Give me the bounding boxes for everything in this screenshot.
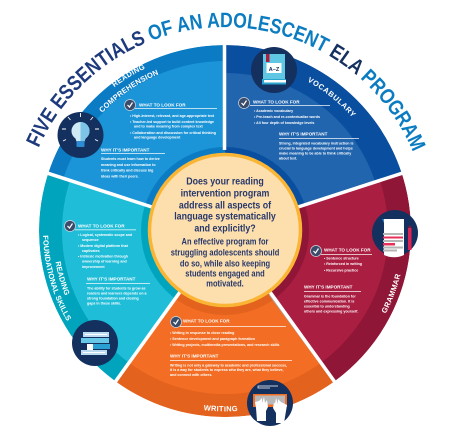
text: what to look for: WHAT TO LOOK FOR: [324, 248, 371, 252]
text: why it's important: The ability for students to grow as: [87, 286, 146, 290]
text: why it's important: [86, 276, 150, 306]
text: why it's important: Students must learn how to derive: [101, 157, 160, 161]
text: why it's important: meaning and use information to: [101, 163, 156, 167]
text: why it's important: [170, 354, 292, 377]
text: why it's important: [279, 132, 359, 160]
text: what to look for: [124, 100, 217, 140]
text: why it's important: make meaning to be able to think critically: [279, 152, 351, 156]
text: what to look for: • Pre-teach and re-contextualize words: [254, 115, 320, 119]
panel: reading foundational skills: [39, 175, 178, 380]
heading: foundational skills: FOUNDATIONAL SKILLS: [43, 236, 71, 320]
heading: grammar: GRAMMAR: [382, 274, 400, 313]
text: what to look for: WHAT TO LOOK FOR: [183, 318, 230, 324]
icon: a-z book: [251, 47, 297, 93]
text: what to look for: • Logical, systematic scope and: [78, 233, 132, 237]
text: what to look for: • Writing projects, multimedia presentations, and research skills: [170, 343, 279, 347]
text: why it's important: others and expressing yourself.: [304, 310, 358, 314]
text: why it's important: Strong, integrated vocabulary instruction is: [279, 142, 353, 146]
answer: do so, while also keeping: [180, 258, 270, 269]
text: why it's important: it is a way for students to express who they are, what they believe,: [170, 368, 283, 372]
heading: vocabulary: VOCABULARY: [308, 76, 356, 116]
text: what to look for: [238, 98, 330, 125]
text: what to look for: • Reinforced in writing: [324, 262, 362, 266]
text: why it's important: strong foundation and closing: [87, 296, 139, 300]
panel: writing: [117, 294, 333, 417]
text: why it's important: Writing is not only a gateway to academic and professional success,: [170, 364, 287, 368]
text: what to look for: • Recursive practice: [324, 268, 358, 272]
question: address all aspects of: [179, 200, 272, 212]
text: what to look for: • Intrinsic motivation through: [78, 254, 128, 258]
text: what to look for: • Academic vocabulary: [254, 109, 293, 113]
text: why it's important: crucial to language development and helps: [279, 146, 353, 150]
question: language systematically: [174, 211, 276, 223]
question: Does your reading: [186, 176, 264, 188]
panel: reading comprehension: [48, 45, 225, 206]
icon: keyboard and hands: [247, 380, 293, 426]
icon: light bulb: [58, 112, 104, 158]
text: what to look for: [64, 220, 136, 269]
text: why it's important: WHY IT'S IMPORTANT: [304, 284, 353, 290]
text: what to look for: WHAT TO LOOK FOR: [253, 100, 300, 104]
text: what to look for: WHAT TO LOOK FOR: [139, 102, 186, 108]
icon: document and pencil: [372, 210, 418, 257]
text: why it's important: and connect with others.: [170, 373, 212, 377]
text: what to look for: [170, 316, 286, 347]
text: why it's important: [304, 284, 361, 314]
answer: motivated.: [206, 278, 244, 289]
text: why it's important: essential to understanding: [304, 304, 350, 308]
text: what to look for: and language development: [134, 136, 181, 140]
icon: stacked books: [72, 320, 118, 366]
text: what to look for: • Writing in response to close reading: [170, 331, 234, 335]
answer: students engaged and: [185, 268, 265, 279]
text: what to look for: WHAT TO LOOK FOR: [78, 224, 125, 228]
heading: comprehension: COMPREHENSION: [100, 70, 158, 112]
text: why it's important: WHY IT'S IMPORTANT: [279, 132, 328, 136]
text: what to look for: • Collaboration and discussion for critical thinking: [130, 131, 216, 135]
text: why it's important: WHY IT'S IMPORTANT: [101, 148, 150, 152]
text: what to look for: ownership of learning and: [82, 260, 127, 264]
text: what to look for: [310, 246, 372, 272]
text: why it's important: WHY IT'S IMPORTANT: [87, 276, 136, 282]
text: what to look for: • Sentence structure: [324, 256, 359, 260]
text: why it's important: [101, 148, 165, 178]
answer: struggling adolescents should: [171, 247, 279, 258]
text: what to look for: • All four depth of knowledge levels: [254, 121, 314, 125]
answer: [171, 236, 279, 289]
answer: An effective program for: [182, 236, 269, 247]
text: what to look for: and to make meaning from complex text: [134, 124, 204, 128]
text: why it's important: Grammar is the foundation for: [304, 294, 356, 298]
text: what to look for: sequence: [82, 238, 99, 242]
question: [174, 176, 276, 235]
panel: vocabulary: [225, 45, 402, 206]
title: FIVE ESSENTIALS OF AN ADOLESCENT ELA PROGRAM: [26, 12, 426, 152]
question: and explicitly?: [194, 223, 256, 235]
text: what to look for: • High-interest, relevant, and age-appropriate text: [130, 114, 215, 118]
text: what to look for: captivates: [82, 249, 100, 253]
icon: a-z book: A–Z: [269, 67, 280, 73]
text: why it's important: effective communication. It is: [304, 300, 354, 304]
text: why it's important: gaps in these skills.: [87, 302, 121, 306]
question: intervention program: [181, 188, 269, 200]
text: why it's important: think critically and discuss big: [101, 168, 153, 172]
text: why it's important: readers and learners depends on a: [87, 292, 148, 296]
panel: grammar: [272, 175, 410, 380]
heading: reading comprehension: READING: [112, 64, 145, 87]
text: what to look for: improvement: [82, 265, 105, 269]
text: what to look for: • Sentence development and paragraph formation: [170, 337, 255, 341]
text: what to look for: • Teacher-led support to build content knowledge: [130, 120, 214, 124]
center question circle: [150, 154, 300, 306]
text: why it's important: ideas with their peers.: [101, 174, 139, 178]
text: why it's important: about text.: [279, 156, 297, 160]
text: why it's important: WHY IT'S IMPORTANT: [170, 354, 219, 358]
text: what to look for: • Modern digital platform that: [78, 244, 129, 248]
heading: writing: WRITING: [204, 405, 238, 412]
heading: reading: READING: [56, 261, 70, 295]
